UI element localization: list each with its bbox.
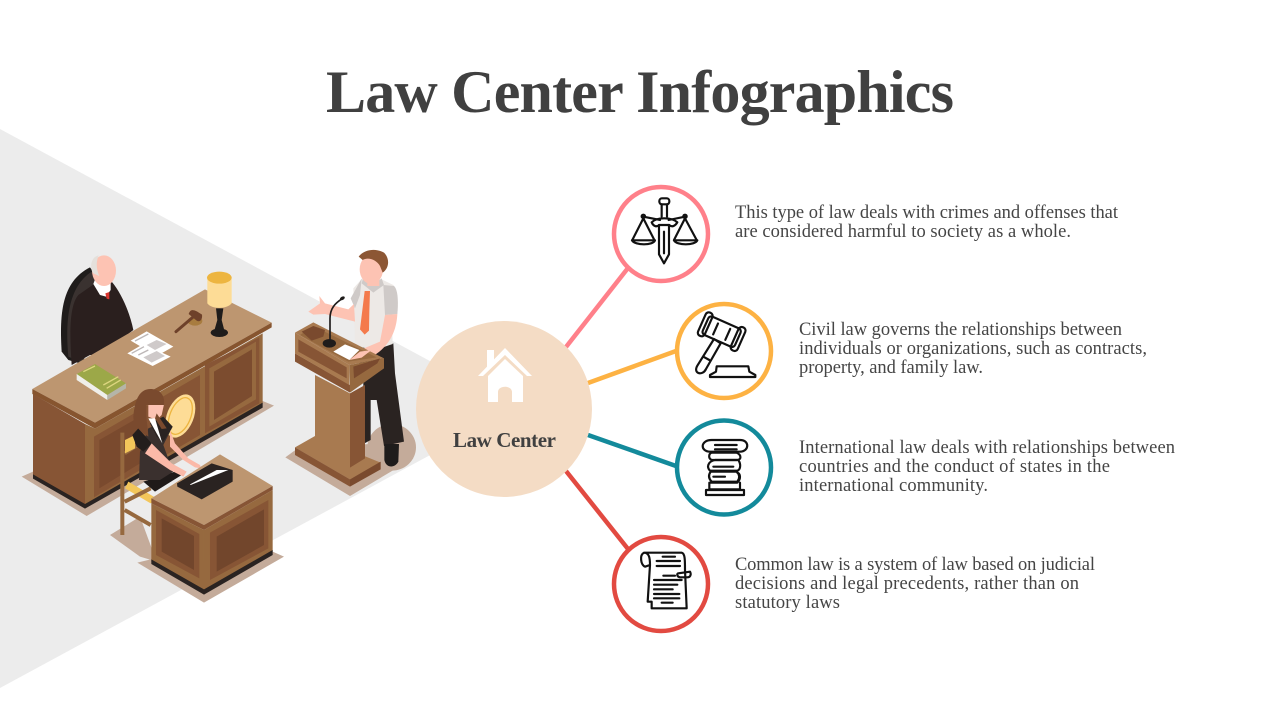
small desk xyxy=(137,454,284,603)
bench front face xyxy=(85,333,263,505)
item 1 text: are considered harmful to society as a whole. xyxy=(735,222,1071,242)
item 1 text: This type of law deals with crimes and offenses that xyxy=(735,203,1119,223)
speaker xyxy=(308,250,404,466)
bench base xyxy=(33,403,263,509)
item 3 text: countries and the conduct of states in the xyxy=(799,457,1110,477)
icon: scroll xyxy=(641,553,691,608)
icon: gavel xyxy=(696,311,755,377)
item 4 text xyxy=(735,555,1095,613)
center label: Law Center xyxy=(453,428,556,452)
item 2 text: property, and family law. xyxy=(799,358,983,378)
illustration: judge bench and clerk xyxy=(22,255,284,603)
item 4 text: Common law is a system of law based on judicial xyxy=(735,555,1095,575)
bench panels xyxy=(94,337,259,497)
lamp xyxy=(207,272,232,337)
podium shadow xyxy=(285,424,416,496)
microphone xyxy=(323,296,345,348)
bench top xyxy=(32,289,272,423)
item 3: international law circle xyxy=(677,420,771,514)
item 4 text: decisions and legal precedents, rather than on xyxy=(735,574,1079,594)
gavel xyxy=(176,310,202,332)
bench shadow xyxy=(22,401,274,516)
clerk xyxy=(132,389,201,492)
bench top edge xyxy=(32,323,272,429)
item 4 text: statutory laws xyxy=(735,593,840,613)
background triangle xyxy=(0,129,517,688)
item 2: civil law circle xyxy=(677,304,771,398)
podium xyxy=(295,322,384,487)
bench left face xyxy=(33,394,85,505)
judge xyxy=(61,255,133,365)
clerk chair xyxy=(122,433,157,535)
clerk shadow xyxy=(110,517,157,562)
central circle: Law Center xyxy=(416,321,592,497)
item 3 text: International law deals with relationships between xyxy=(799,438,1175,458)
connector lines xyxy=(566,268,676,549)
papers xyxy=(127,331,173,366)
icon: house xyxy=(478,348,532,402)
item 2 text: individuals or organizations, such as contracts, xyxy=(799,339,1147,359)
item 1: criminal law circle xyxy=(614,187,708,281)
item 3 text xyxy=(799,438,1175,496)
clerk chair medallion xyxy=(159,390,201,442)
item 2 text xyxy=(799,320,1147,378)
icon: column of books xyxy=(703,440,747,495)
item 3 text: international community. xyxy=(799,476,988,496)
item 2 text: Civil law governs the relationships between xyxy=(799,320,1122,340)
illustration: speaker at podium xyxy=(285,250,416,496)
icon: sword and scales xyxy=(632,198,697,263)
green book xyxy=(77,364,126,400)
typewriter xyxy=(177,463,233,499)
title: Law Center Infographics xyxy=(326,59,954,125)
item 4: common law circle xyxy=(614,537,708,631)
item 1 text xyxy=(735,203,1119,242)
